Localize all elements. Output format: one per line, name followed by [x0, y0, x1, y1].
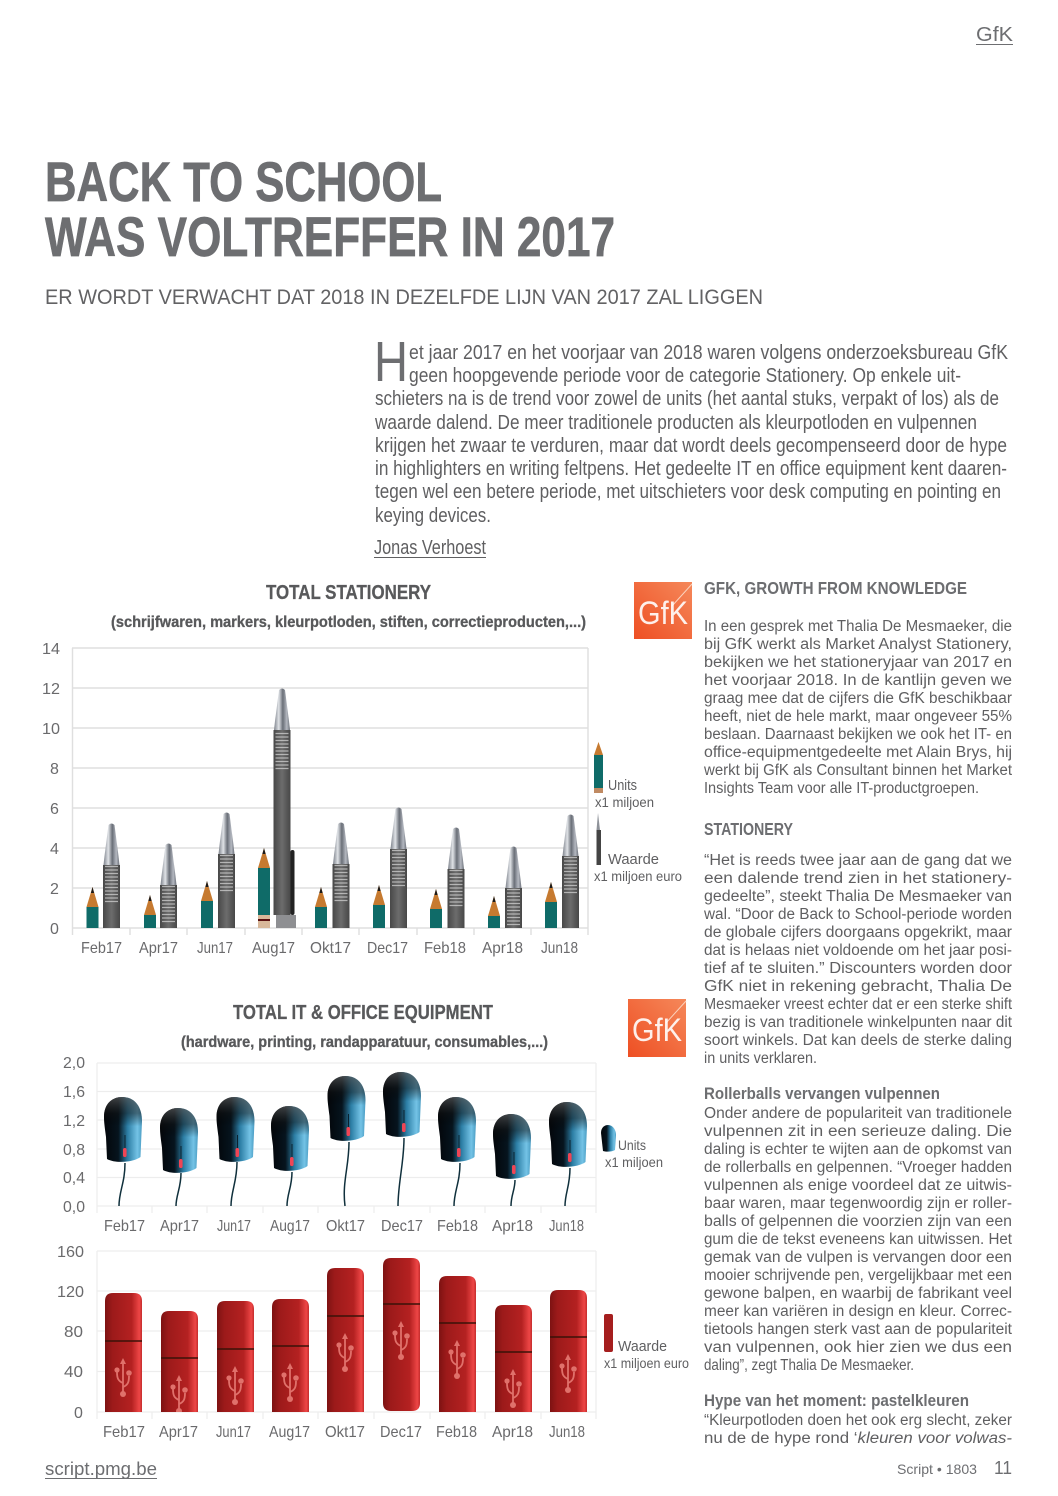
x axis labels: Okt17: [326, 1218, 365, 1235]
legend: mouse units: x1 miljoen: [605, 1154, 663, 1170]
right column: paragraph rollerballs: Onder andere de populariteit van traditionele: [704, 1105, 1012, 1122]
icon: GfK logo 2: [628, 999, 686, 1057]
right column: paragraph hype: “Kleurpotloden doen het ook erg slecht, zeker: [704, 1412, 1012, 1429]
x axis labels: Aug17: [269, 1424, 310, 1441]
legend: stationery: x1 miljoen: [595, 794, 654, 810]
x axis labels: Okt17: [310, 940, 351, 957]
right column: paragraph rollerballs: de rollerballs en gelpennen. “Vroeger hadden: [704, 1159, 1012, 1176]
intro text block: geen hoopgevende periode voor de categorie Stationery. Op enkele uit-: [409, 365, 961, 387]
y axis labels: 0,0: [63, 1199, 85, 1216]
right column: paragraph rollerballs: meer kan variëren in design en kleur. Correc-: [704, 1303, 1012, 1320]
y axis labels: [63, 1055, 85, 1216]
right column: paragraph GfK: Insights Team voor alle IT-productgroepen.: [704, 780, 979, 797]
right column: paragraph stationery: in units verklaren.: [704, 1050, 817, 1067]
y axis labels: 120: [57, 1284, 84, 1301]
x axis labels: Jun18: [541, 940, 578, 957]
y axis labels: 2,0: [63, 1055, 85, 1072]
intro text block: [374, 330, 1009, 527]
right column: paragraph GfK: [703, 618, 1013, 797]
chart title: total stationery: (schrijfwaren, markers, kleurpotloden, stiften, correctieproducten,...): [111, 614, 586, 631]
x axis labels: Jun18: [549, 1218, 584, 1235]
x axis labels: [103, 1424, 585, 1441]
right column: paragraph rollerballs: vulpennen zit in een serieuze daling. Die: [704, 1123, 1012, 1140]
title: BACK TO SCHOOL: [45, 150, 442, 213]
x axis labels: Dec17: [380, 1424, 422, 1441]
right column: paragraph rollerballs: gemak van de vulpen is vervangen door een: [704, 1249, 1012, 1266]
mice: [104, 1097, 142, 1162]
y axis labels: 8: [50, 761, 59, 778]
pencils: units: [86, 848, 557, 928]
USB sticks: [105, 1258, 587, 1412]
right column: paragraph hype: nu de de hype rond ‘ kleuren voor volwas-: [704, 1430, 1012, 1447]
right column: paragraph rollerballs: [704, 1105, 1013, 1374]
mouse cables: [119, 1138, 570, 1206]
x axis labels: Okt17: [325, 1424, 365, 1441]
right column: paragraph stationery: tief af te sluiten.” Discounters worden door: [704, 960, 1012, 977]
chart: total stationery: [42, 641, 588, 957]
drop cap: H: [374, 330, 408, 394]
y axis labels: 4: [50, 841, 59, 858]
right column: paragraph GfK: het voorjaar 2018. In de kantlijn geven we: [704, 672, 1012, 689]
chart title: total stationery: TOTAL STATIONERY: [266, 582, 432, 604]
legend: USB waarde: [604, 1314, 689, 1371]
chart title: total IT & office equipment: (hardware, printing, randapparatuur, consumables,...): [181, 1034, 548, 1051]
x axis labels: Dec17: [381, 1218, 423, 1235]
y axis labels: 12: [42, 681, 60, 698]
y axis labels: 0,8: [63, 1142, 85, 1159]
y axis labels: 6: [50, 801, 59, 818]
y axis labels: 160: [57, 1244, 84, 1261]
y axis labels: 0: [50, 921, 59, 938]
right column: paragraph GfK: bij GfK werkt als Market Analyst Stationery,: [704, 636, 1012, 653]
y axis labels: [42, 641, 60, 938]
intro text block: waarde dalend. De meer traditionele producten als kleurpotloden en vulpennen: [374, 412, 977, 434]
section label: GfK: GfK: [976, 24, 1014, 46]
y axis labels: 0: [74, 1405, 83, 1422]
USB symbols: [114, 1321, 577, 1414]
right column: paragraph GfK: beslaan. Daarnaast bekijken we ook het IT- en: [704, 726, 1012, 743]
legend: stationery: [594, 742, 682, 884]
y axis labels: 0,4: [63, 1170, 85, 1187]
y axis labels: 80: [64, 1324, 83, 1341]
right column: paragraph stationery: wal. “Door de Back to School-periode worden: [703, 906, 1012, 923]
title: WAS VOLTREFFER IN 2017: [45, 205, 615, 268]
x axis labels: Apr17: [160, 1218, 199, 1235]
right column: paragraph GfK: bekijken we het stationeryjaar van 2017 en: [704, 654, 1012, 671]
x axis labels: Apr17: [159, 1424, 198, 1441]
x axis labels: Apr18: [492, 1218, 533, 1235]
legend: stationery: Units: [608, 777, 637, 794]
right column: paragraph stationery: dat is helaas niet voldoende om het jaar posi-: [704, 942, 1012, 959]
right column: paragraph stationery: [703, 852, 1013, 1067]
x axis labels: Dec17: [367, 940, 408, 957]
chart: waarde IT USB sticks: [57, 1244, 596, 1441]
icon: mouse: [601, 1125, 616, 1152]
x axis labels: [104, 1218, 584, 1235]
x axis labels: Aug17: [270, 1218, 310, 1235]
x axis labels: Feb18: [424, 940, 466, 957]
x axis labels: Feb17: [81, 940, 122, 957]
right column: paragraph rollerballs: gewone balpen, en waarbij de fabrikant veel: [704, 1285, 1012, 1302]
y axis labels: 1,2: [63, 1113, 85, 1130]
x axis labels: Apr18: [482, 940, 523, 957]
intro text block: keying devices.: [375, 505, 491, 527]
icon: GfK logo 1: GfK: [638, 595, 688, 631]
right column: paragraph GfK: In een gesprek met Thalia De Mesmaeker, die: [704, 618, 1012, 635]
right column: paragraph rollerballs: baar waren, maar tegenwoordig zijn er roller-: [704, 1195, 1012, 1212]
chart title: total IT & office equipment: TOTAL IT & OFFICE EQUIPMENT: [233, 1002, 493, 1024]
x axis labels: Aug17: [252, 940, 295, 957]
right column: paragraph stationery: de globale cijfers doorgaans opgekrikt, maar: [704, 924, 1012, 941]
right column: paragraph stationery: bezig is van traditionele winkelpunten naar dit: [704, 1014, 1013, 1031]
right column: heading rollerballs: Rollerballs vervangen vulpennen: [704, 1084, 940, 1103]
y axis labels: [57, 1244, 84, 1422]
y axis labels: 14: [42, 641, 60, 658]
y axis labels: 1,6: [63, 1084, 85, 1101]
y axis labels: 40: [64, 1364, 83, 1381]
chart title: total IT & office equipment: [181, 1002, 548, 1051]
icon: pen: [596, 813, 601, 865]
x axis labels: Jun17: [197, 940, 233, 957]
right column: paragraph rollerballs: daling is echter te wijten aan de opkomst van: [704, 1141, 1012, 1158]
x axis labels: [81, 940, 578, 957]
right column: paragraph rollerballs: gum die de tekst eveneens kan uitwissen. Het: [704, 1231, 1013, 1248]
right column: paragraph rollerballs: vulpennen als enige voordeel dat ze uitwis-: [704, 1177, 1012, 1194]
right column: paragraph stationery: “Het is reeds twee jaar aan de gang dat we: [704, 852, 1012, 869]
right column: paragraph stationery: GfK niet in rekening gebracht, Thalia De: [704, 978, 1012, 995]
chart title: total stationery: [111, 582, 586, 631]
icon: GfK logo 1: [634, 582, 692, 639]
legend: stationery: x1 miljoen euro: [594, 868, 682, 884]
legend: mouse units: [601, 1125, 663, 1170]
icon: USB stick: [604, 1314, 613, 1352]
subtitle: ER WORDT VERWACHT DAT 2018 IN DEZELFDE LIJN VAN 2017 ZAL LIGGEN: [45, 286, 763, 309]
x axis labels: Feb17: [103, 1424, 145, 1441]
right column: paragraph rollerballs: tietools hangen sterk vast aan de populariteit: [704, 1321, 1013, 1338]
y axis labels: 10: [42, 721, 60, 738]
right column: paragraph rollerballs: van vulpennen, ook hier zien we dus een: [704, 1339, 1012, 1356]
legend: USB waarde: x1 miljoen euro: [604, 1355, 689, 1371]
x axis labels: Apr17: [139, 940, 178, 957]
icon: GfK logo 2: GfK: [632, 1012, 682, 1048]
right column: paragraph hype: [704, 1412, 1012, 1447]
footer: website: script.pmg.be: [45, 1459, 157, 1479]
right column: paragraph rollerballs: daling”, zegt Thalia De Mesmaeker.: [704, 1357, 914, 1374]
footer: page number: 11: [994, 1458, 1012, 1478]
legend: stationery: Waarde: [608, 851, 659, 868]
right column: paragraph GfK: heeft, niet de hele markt, maar ongeveer 55%: [704, 708, 1012, 725]
right column: paragraph GfK: werkt bij GfK als Consultant binnen het Market: [703, 762, 1013, 779]
x axis labels: Jun17: [216, 1424, 251, 1441]
USB divider lines: [105, 1304, 587, 1358]
right column: paragraph GfK: office-equipmentgedeelte met Alain Brys, hij: [704, 744, 1012, 761]
right column: paragraph stationery: gedeelte”, steekt Thalia De Mesmaeker van: [704, 888, 1012, 905]
right column: heading GfK: GFK, GROWTH FROM KNOWLEDGE: [704, 578, 967, 598]
x axis labels: Jun17: [217, 1218, 251, 1235]
right column: paragraph GfK: graag mee dat de cijfers die GfK beschikbaar: [704, 690, 1012, 707]
x axis labels: Feb17: [104, 1218, 145, 1235]
icon: pencil: [594, 742, 603, 793]
x axis labels: Feb18: [436, 1424, 477, 1441]
right column: paragraph rollerballs: balls of gelpennen die voorzien zijn van een: [704, 1213, 1012, 1230]
chart: units IT mice: [63, 1055, 596, 1235]
pens: waarde: [103, 688, 579, 928]
right column: heading stationery: STATIONERY: [704, 819, 793, 839]
x axis labels: Feb18: [437, 1218, 478, 1235]
title: [45, 150, 615, 268]
right column: paragraph rollerballs: mooier schrijvende pen, vergelijkbaar met een: [704, 1267, 1012, 1284]
x axis labels: Jun18: [549, 1424, 585, 1441]
legend: USB waarde: Waarde: [618, 1338, 667, 1355]
x axis labels: Apr18: [492, 1424, 533, 1441]
right column: paragraph stationery: een dalende trend zien in het stationery-: [704, 870, 1012, 887]
footer: publication: Script • 1803: [897, 1461, 977, 1477]
right column: paragraph stationery: soort winkels. Dat kan deels de sterke daling: [704, 1032, 1012, 1049]
right column: heading hype: Hype van het moment: pastelkleuren: [704, 1391, 969, 1410]
right column: paragraph stationery: Mesmaeker vreest echter dat er een sterke shift: [704, 996, 1013, 1013]
legend: mouse units: Units: [618, 1137, 646, 1153]
y axis labels: 2: [50, 881, 59, 898]
author: Jonas Verhoest: [374, 537, 486, 559]
